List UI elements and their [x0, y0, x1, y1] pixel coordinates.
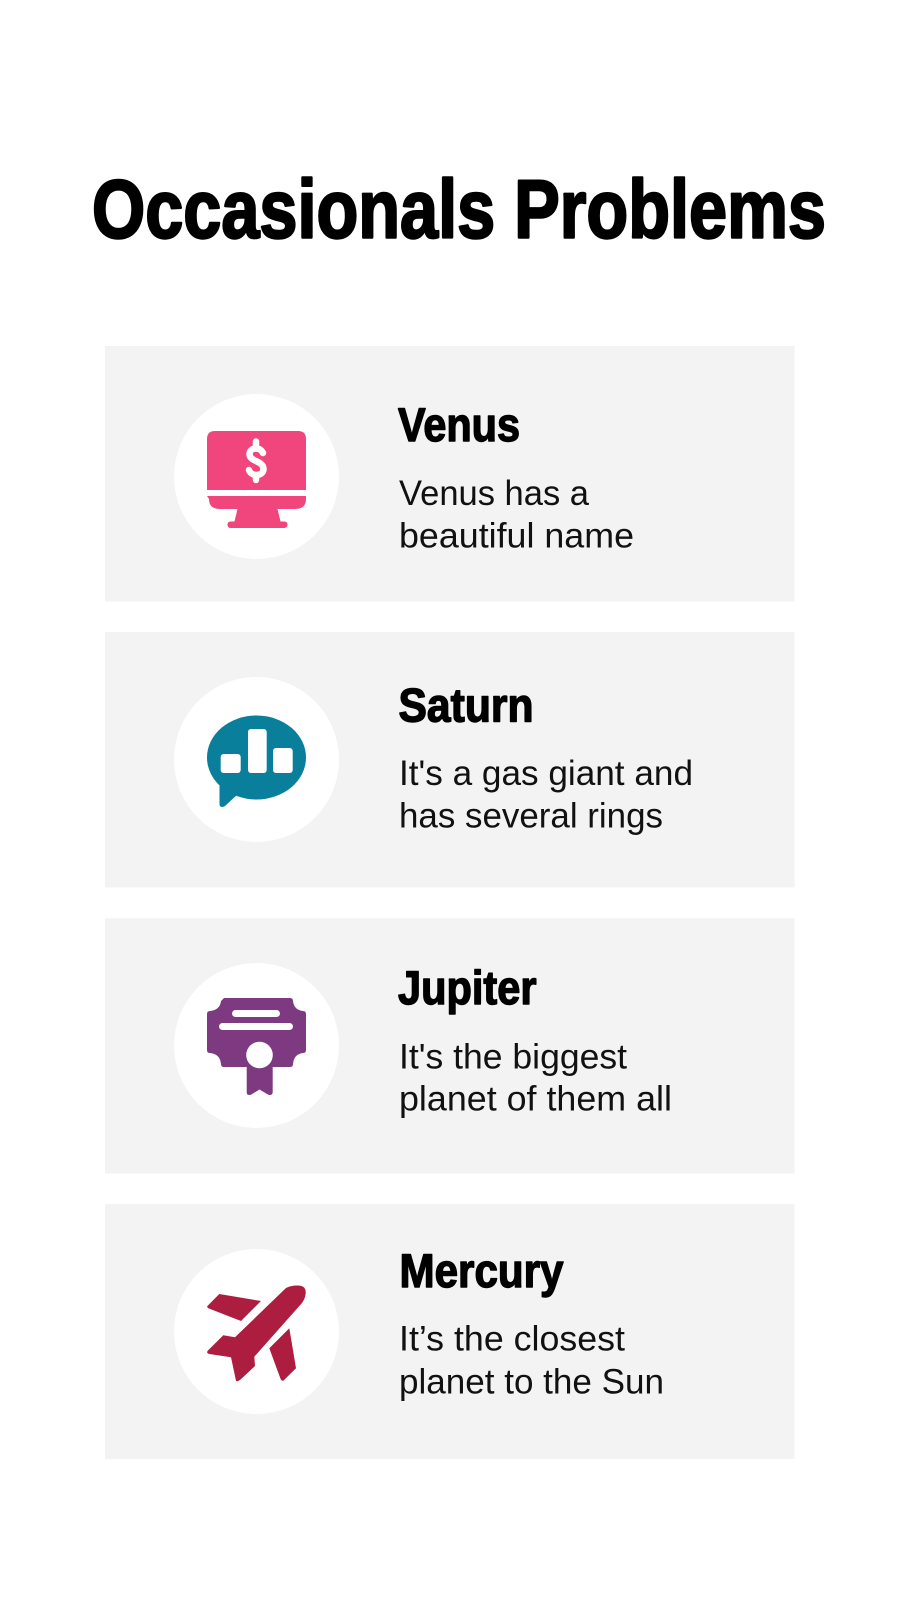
- panel: Jupiter: [105, 918, 794, 1174]
- text: Jupiter description: It's the biggest: [399, 1037, 627, 1076]
- text: Mercury description: planet to the Sun: [399, 1362, 664, 1401]
- icon: airplane: [174, 1249, 339, 1414]
- panel: Mercury: [105, 1204, 794, 1459]
- heading: Saturn: Saturn: [398, 678, 534, 731]
- text: Jupiter description: [399, 1037, 672, 1119]
- panel: Venus: [105, 346, 794, 602]
- text: Saturn description: It's a gas giant and: [399, 754, 693, 793]
- icon: computer monitor with dollar sign: [174, 394, 339, 559]
- heading: Venus: Venus: [398, 398, 520, 451]
- text: Venus description: [399, 474, 634, 556]
- icon: certificate with ribbon: [174, 963, 339, 1128]
- text: Venus description: beautiful name: [399, 517, 634, 556]
- panel: Saturn: [105, 632, 794, 888]
- text: Mercury description: [399, 1320, 664, 1401]
- text: Jupiter description: planet of them all: [399, 1080, 672, 1119]
- text: Venus description: Venus has a: [399, 474, 590, 513]
- heading: Jupiter: Jupiter: [398, 961, 536, 1014]
- text: Saturn description: has several rings: [399, 796, 663, 835]
- text: Saturn description: [399, 754, 693, 835]
- icon: speech bubble with bar chart: [174, 677, 339, 842]
- heading: Mercury: Mercury: [400, 1244, 564, 1297]
- text: Mercury description: It’s the closest: [399, 1320, 625, 1359]
